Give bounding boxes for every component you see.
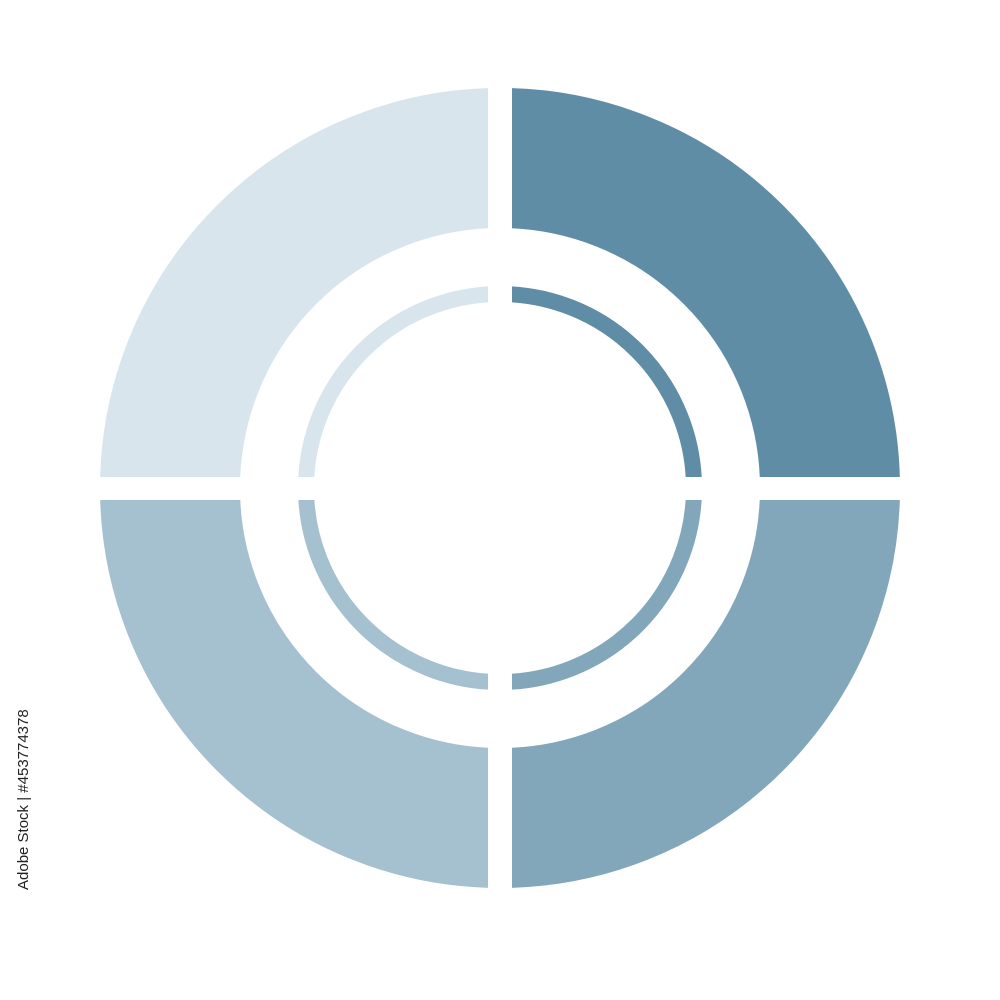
segment: bottom-right — [512, 500, 900, 888]
donut chart — [17, 88, 900, 890]
segment: top-right — [512, 88, 900, 477]
segment: bottom-left — [100, 500, 488, 888]
segment: top-left — [100, 88, 488, 477]
stock id text: Adobe Stock | #453774378 — [15, 709, 32, 890]
